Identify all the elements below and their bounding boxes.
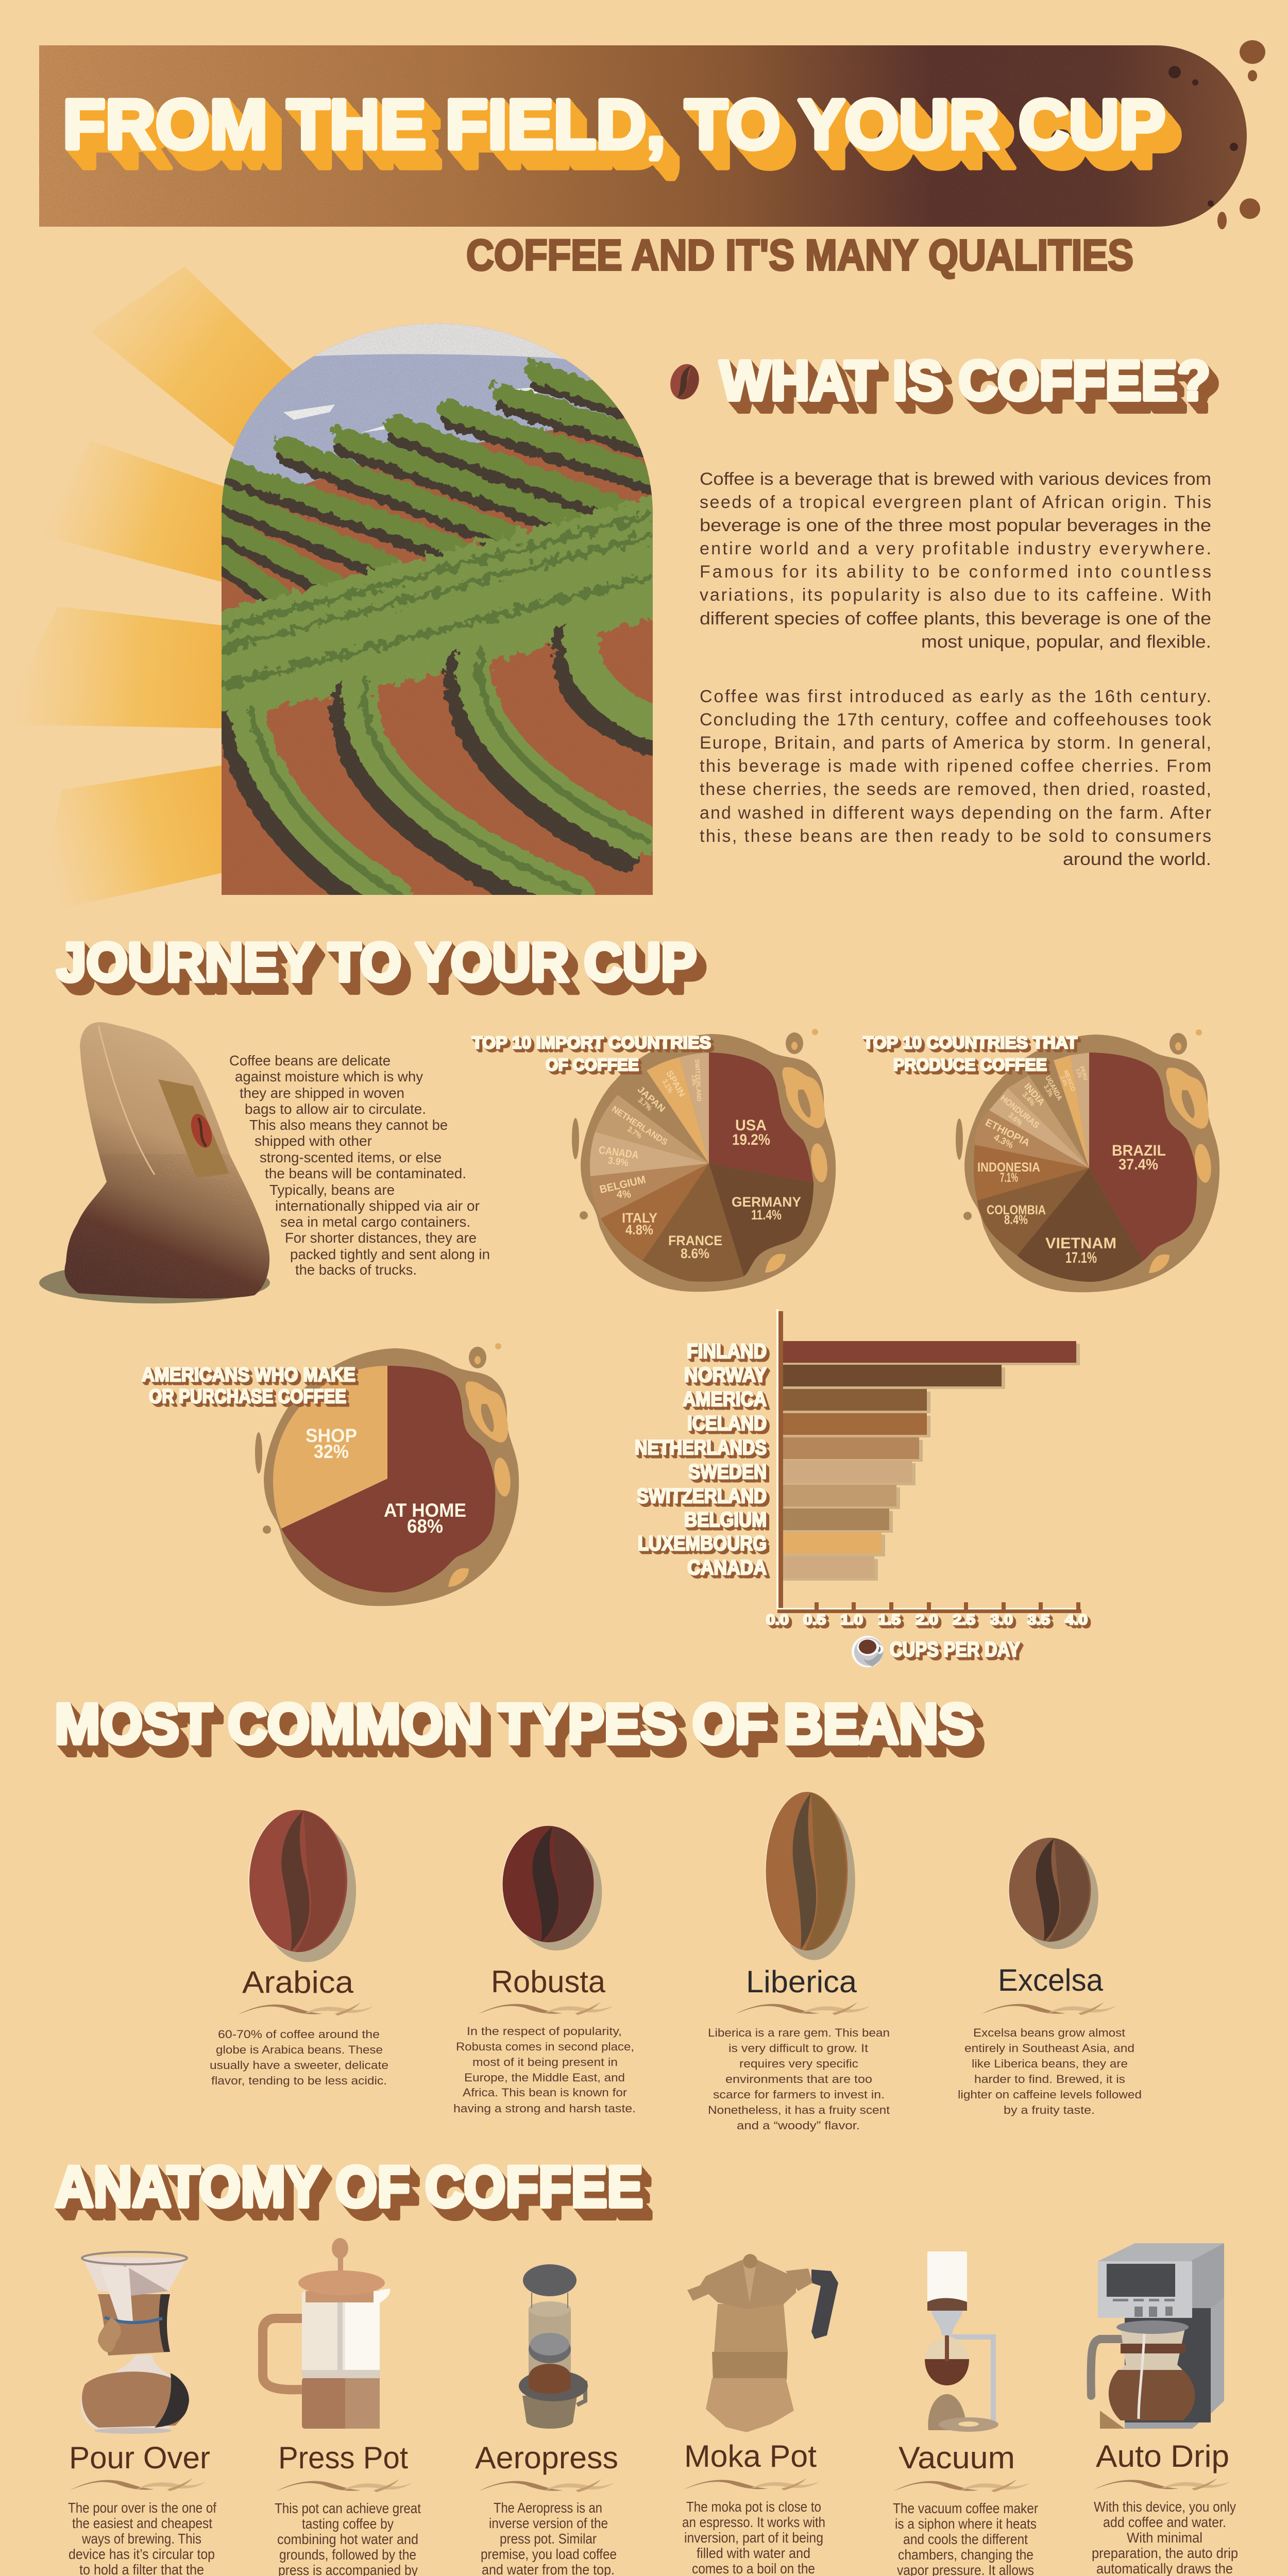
bar chart: cups per day by country [635,1309,1088,1667]
brewer description: the easiest and cheapest [72,2515,212,2531]
bean description: Europe, the Middle East, and [464,2071,625,2084]
pie 2 labels: 2.4% [1059,1075,1069,1087]
pie chart: make or purchase coffee [255,1343,519,1606]
text: sack description: strong-scented items, or else [260,1149,442,1165]
coffee stain blob [956,1029,1219,1292]
bean description [210,2028,388,2087]
text: sack description: This also means they cannot be [249,1117,448,1133]
pie 2 labels: 3.4% [1020,1090,1037,1108]
title banner [39,40,1265,229]
slice India [1008,1075,1089,1168]
slice shop [273,1366,387,1529]
country labels: LUXEMBOURG [638,1532,767,1555]
swash [1094,2478,1230,2490]
pie 2 labels: 17.1% [1065,1249,1097,1266]
brewer description: This pot can achieve great [275,2500,421,2516]
text: sack description: the beans will be contaminated. [265,1165,466,1181]
brewer description [681,2499,827,2576]
text: what is coffee paragraph 1: most unique, popular, and flexible. [921,632,1211,652]
axis tick labels: 0.0 [766,1612,789,1628]
pie 1 labels: 8.6% [681,1246,709,1261]
pie 1 labels: BELGIUM [599,1174,647,1196]
pie 3 title: OR PURCHASE COFFEE [149,1386,346,1408]
brewer name: Pour Over [69,2441,210,2475]
bean name: Robusta [491,1964,606,1999]
pie 2 labels: ETHIOPIA [984,1117,1031,1149]
bean description: entirely in Southeast Asia, and [964,2042,1134,2055]
swash [238,2003,373,2015]
brewer description: With minimal [1127,2530,1202,2546]
pie 3 title [142,1364,355,1408]
brewer description: and cools the different [903,2531,1028,2547]
pie 1 title [472,1033,711,1074]
bean description: Liberica is a rare gem. This bean [708,2026,890,2039]
bean description: flavor, tending to be less acidic. [211,2074,387,2087]
pie 1 labels: SPAIN [664,1069,687,1098]
icon: aeropress [519,2264,588,2429]
text: sack description: Typically, beans are [269,1182,395,1198]
bean description: Robusta comes in second place, [456,2040,634,2053]
bean description: Africa. This bean is known for [463,2086,627,2099]
swash [479,2479,614,2492]
text: what is coffee paragraph 1: entire world and a very profitable industry everywhere. [700,539,1211,558]
pie 1 labels: 4% [617,1189,631,1200]
bean description: most of it being present in [472,2056,618,2069]
heading: anatomy of coffee: ANATOMY OF COFFEE [55,2155,643,2219]
text: sack description: against moisture which is why [235,1069,423,1084]
pie 1 labels: USA [735,1117,767,1134]
brewer description: The vacuum coffee maker [893,2500,1038,2516]
heading: what is coffee: WHAT IS COFFEE? [720,349,1210,412]
slice Vietnam [1017,1168,1143,1282]
brewer name: Moka Pot [684,2439,817,2473]
text: what is coffee paragraph 1: Famous for its ability to be conformed into countless [700,562,1211,582]
pie 3 labels: SHOP [306,1425,357,1446]
text: what is coffee paragraph 2: Concluding the 17th century, coffee and coffeehouses took [700,710,1212,730]
pie 1 labels: 3.9% [607,1155,629,1169]
brewer: moka pot [681,2254,838,2576]
slice Uganda [1029,1060,1089,1168]
slice Mexico [1054,1055,1089,1168]
swash [893,2479,1030,2492]
pie 1 labels: 3.1% [660,1078,675,1095]
pie 2 labels: HONDURAS [998,1093,1041,1130]
bean description: In the respect of popularity, [467,2025,622,2038]
text: sack description: For shorter distances, they are [285,1230,477,1246]
brewer: vacuum [893,2251,1038,2576]
text: sack description [229,1053,490,1278]
brewer: pour over [68,2252,216,2576]
bean description [958,2026,1142,2116]
swash [684,2478,820,2490]
brewer description: add coffee and water. [1103,2514,1226,2530]
bean description: environments that are too [725,2073,872,2086]
bean description: Nonetheless, it has a fruity scent [708,2104,890,2116]
icon: arabica bean [248,1810,356,1962]
text: sack description: sea in metal cargo containers. [280,1214,470,1230]
pie 1 labels: 19.2% [732,1131,770,1148]
pie 1 labels: GERMANY [732,1194,801,1210]
country labels: FINLAND [687,1340,767,1363]
slice at home [281,1366,495,1592]
pie chart: top 10 producing countries [956,1029,1219,1292]
pie 1 title: OF COFFEE [546,1055,639,1074]
brewer: aeropress [475,2264,618,2576]
pie 1 labels [598,1059,801,1261]
slice Japan [618,1071,709,1163]
text: what is coffee paragraph 1 [700,469,1211,652]
brewer description: device has it’s circular top [69,2546,215,2562]
text: what is coffee paragraph 2 [700,687,1212,869]
country labels: SWEDEN [688,1461,767,1483]
slice Spain [647,1057,709,1163]
bars [777,1341,1080,1581]
text: sack description: the backs of trucks. [295,1262,417,1278]
text: what is coffee paragraph 2: Europe, Britain, and parts of America by storm. In general, [700,733,1211,753]
text: what is coffee paragraph 2: Coffee was first introduced as early as the 16th century. [700,687,1211,706]
pie 2 labels: MEXICO [1062,1069,1077,1092]
pie 1 labels: 2.8% [690,1075,697,1086]
pie 2 labels: VIETNAM [1045,1235,1116,1252]
pie 1 title: TOP 10 IMPORT COUNTRIES [472,1033,711,1052]
brewer description [893,2500,1038,2576]
brewer description: premise, you load coffee [481,2546,617,2562]
slice France [642,1163,744,1282]
bean description: by a fruity taste. [1004,2104,1095,2116]
icon: moka pot [687,2254,838,2432]
country labels: BELGIUM [684,1509,767,1531]
pie 1 labels: SWITZERLAND [693,1059,703,1102]
pie chart: top 10 import countries [572,1029,836,1292]
swash [981,2002,1116,2015]
swash [70,2478,206,2491]
brewer description: ways of brewing. This [81,2531,201,2547]
coffee stain blob [255,1343,519,1606]
brewer description: The Aeropress is an [494,2500,602,2516]
pie 2 labels: 2.2% [1075,1068,1083,1079]
text: sack description: Coffee beans are delicate [229,1053,391,1069]
country labels: NORWAY [684,1364,767,1386]
brewer name: Auto Drip [1096,2439,1229,2473]
text: what is coffee paragraph 2: around the world. [1063,850,1211,869]
icon: coffee sack [39,1015,283,1309]
pie 1 labels: JAPAN [636,1084,667,1114]
pie 2 labels: BRAZIL [1112,1142,1166,1159]
pie 2 labels: INDONESIA [977,1160,1040,1175]
text: sack description: they are shipped in woven [240,1085,404,1101]
brewer description: chambers, changing the [898,2547,1033,2563]
country labels: SWITZERLAND [637,1485,767,1507]
icon: robusta bean [502,1826,602,1951]
pie 3 labels: 68% [407,1516,443,1537]
brewer: press pot [263,2238,421,2576]
pie 2 labels: 3.6% [1007,1111,1024,1127]
pie 2 labels: PERU [1078,1065,1089,1081]
pie 1 labels: ITALY [622,1210,657,1226]
axis tick labels: 3.5 [1027,1612,1050,1628]
icon: chemex [81,2252,189,2434]
brewer description: combining hot water and [277,2531,418,2547]
axis tick labels: 1.5 [878,1612,901,1628]
bean description: globe is Arabica beans. These [216,2043,383,2056]
brewer description: With this device, you only [1094,2499,1236,2515]
slice Ethiopia [975,1110,1089,1168]
country labels: NETHERLANDS [635,1436,767,1459]
text: what is coffee paragraph 2: this, these beans are then ready to be sold to consumers [700,826,1211,846]
slice Colombia [977,1168,1089,1256]
brewer description [68,2500,216,2576]
brewer description: The moka pot is close to [686,2499,821,2515]
country labels [635,1340,767,1579]
brewer description: is a siphon where it heats [895,2516,1037,2532]
vineyard photo in arch [214,324,665,910]
pie 2 labels: COLOMBIA [987,1203,1046,1217]
brewer name: Press Pot [278,2441,408,2475]
text: what is coffee paragraph 2: and washed in different ways depending on the farm. After [700,803,1211,823]
bean name: Liberica [746,1964,857,1999]
bean description: requires very specific [739,2057,858,2070]
pie 3 labels: AT HOME [384,1500,466,1521]
bean description: 60-70% of coffee around the [218,2028,380,2041]
swash [276,2479,412,2492]
icon: excelsa bean [1008,1838,1098,1949]
text: what is coffee paragraph 2: this beverage is made with ripened coffee cherries. From [700,756,1211,776]
icon: small cup [852,1636,884,1667]
bean: Excelsa [958,1838,1142,2116]
text: sack description: bags to allow air to circulate. [245,1101,426,1117]
icon: liberica bean [765,1792,855,1960]
pie 2 title: TOP 10 COUNTRIES THAT [863,1033,1077,1052]
brewer description: grounds, followed by the [279,2547,416,2563]
pie 1 labels: 3.7% [636,1096,654,1113]
country labels: CANADA [687,1556,767,1579]
text: what is coffee paragraph 1: seeds of a tropical evergreen plant of African origin. This [700,493,1211,512]
brewer description: The pour over is the one of [68,2500,216,2516]
bean description: Excelsa beans grow almost [973,2026,1125,2039]
bean description: scarce for farmers to invest in. [713,2088,885,2101]
axis tick labels: 0.5 [803,1612,826,1628]
slice Switzerland [680,1053,709,1163]
axis tick labels: 2.0 [916,1612,938,1628]
axis tick labels: 1.0 [840,1612,863,1628]
pie 3 labels: 32% [314,1441,349,1462]
axes [776,1309,1081,1613]
axis tick labels [766,1612,1088,1628]
brewer description: filled with water and [697,2545,810,2561]
bean description: harder to find. Brewed, it is [974,2073,1125,2086]
slice Brazil [1089,1053,1197,1261]
slice USA [709,1053,814,1182]
pie 1 labels: CANADA [598,1144,639,1161]
icon: drip machine [1091,2243,1224,2429]
icon: coffee bean [666,360,703,403]
brewer description: preparation, the auto drip [1092,2545,1238,2561]
swash [735,2002,870,2015]
axis tick labels: 3.0 [990,1612,1013,1628]
banner title text: FROM THE FIELD, TO YOUR CUP [63,85,1165,163]
coffee stain blob [572,1029,836,1292]
brewer description: an espresso. It works with [682,2514,825,2530]
subtitle: COFFEE AND IT'S MANY QUALITIES [466,231,1133,279]
brewer description: inverse version of the [489,2515,608,2531]
pie 2 title [863,1033,1077,1074]
icon: siphon [925,2251,998,2432]
slice Netherlands [595,1095,709,1163]
bean description: lighter on caffeine levels followed [958,2088,1142,2101]
pie 2 labels: INDIA [1022,1081,1047,1107]
pie 2 labels: 4.3% [992,1132,1015,1150]
text: sack description: internationally shipped via air or [275,1198,480,1214]
pie 1 labels: 3.7% [626,1125,643,1141]
pie 1 labels: 11.4% [751,1207,782,1223]
sun rays [0,266,299,914]
axis tick labels: 2.5 [953,1612,975,1628]
brewer description: press pot. Similar [500,2531,597,2547]
pie 1 labels: 4.8% [625,1222,653,1238]
pie 2 labels: 3.3% [1042,1083,1055,1098]
axis title: CUPS PER DAY [890,1638,1020,1661]
slice Honduras [989,1088,1089,1168]
pie 2 labels: 8.4% [1004,1213,1028,1227]
bean name: Arabica [242,1965,354,1999]
bean description: is very difficult to grow. It [728,2042,868,2055]
bean name: Excelsa [998,1963,1104,1997]
bean description: and a “woody” flavor. [737,2119,860,2132]
country labels: ICELAND [687,1412,767,1435]
brewer description: inversion, part of it being [684,2530,823,2546]
bean: Arabica [210,1810,388,2087]
bean description: usually have a sweeter, delicate [210,2059,388,2072]
heading: journey to your cup: JOURNEY TO YOUR CUP [57,932,697,993]
text: sack description: packed tightly and sent along in [290,1246,490,1262]
slice Belgium [590,1163,709,1218]
slice Italy [601,1163,709,1261]
bean description [708,2026,890,2132]
brewer description [1092,2499,1238,2576]
swash [478,2002,613,2015]
brewer name: Vacuum [899,2441,1015,2475]
bean description [453,2025,636,2115]
brewer description: tasting coffee by [302,2516,394,2532]
slice Indonesia [974,1145,1089,1200]
text: what is coffee paragraph 1: Coffee is a beverage that is brewed with various devices from [700,469,1211,489]
axis tick labels: 4.0 [1065,1612,1088,1628]
heading: most common types of beans: MOST COMMON TYPES OF BEANS [55,1692,975,1756]
pie 1 labels: FRANCE [668,1233,722,1248]
bean description: having a strong and harsh taste. [453,2102,636,2115]
text: what is coffee paragraph 1: different species of coffee plants, this beverage is one of the [700,609,1211,629]
text: what is coffee paragraph 1: variations, its popularity is also due to its caffeine. With [700,585,1211,605]
bean description: like Liberica beans, they are [972,2057,1128,2070]
brewer name: Aeropress [475,2441,618,2475]
bean: Robusta [453,1826,636,2115]
brewer description [275,2500,421,2576]
pie 2 labels [977,1065,1166,1266]
slice Peru [1071,1053,1089,1168]
pie 2 labels: 37.4% [1118,1156,1158,1173]
bean: Liberica [708,1792,890,2132]
pie 2 labels: UGANDA [1044,1074,1064,1101]
slice Canada [590,1132,709,1176]
slice Germany [709,1163,814,1276]
brewer description [479,2500,618,2576]
text: sack description: shipped with other [255,1133,372,1149]
pie 1 labels: NETHERLANDS [610,1104,669,1147]
icon: french press [263,2238,390,2429]
text: what is coffee paragraph 1: beverage is one of the three most popular beverages in the [700,516,1211,535]
pie 3 labels [306,1425,466,1537]
pie 3 title: AMERICANS WHO MAKE [142,1364,355,1386]
text: what is coffee paragraph 2: these cherries, the seeds are removed, then dried, roasted, [700,779,1211,799]
pie 2 labels: 7.1% [1000,1171,1018,1185]
brewer: auto drip [1091,2243,1238,2576]
pie 2 title: PRODUCE COFFEE [893,1055,1047,1074]
country labels: AMERICA [683,1388,767,1411]
